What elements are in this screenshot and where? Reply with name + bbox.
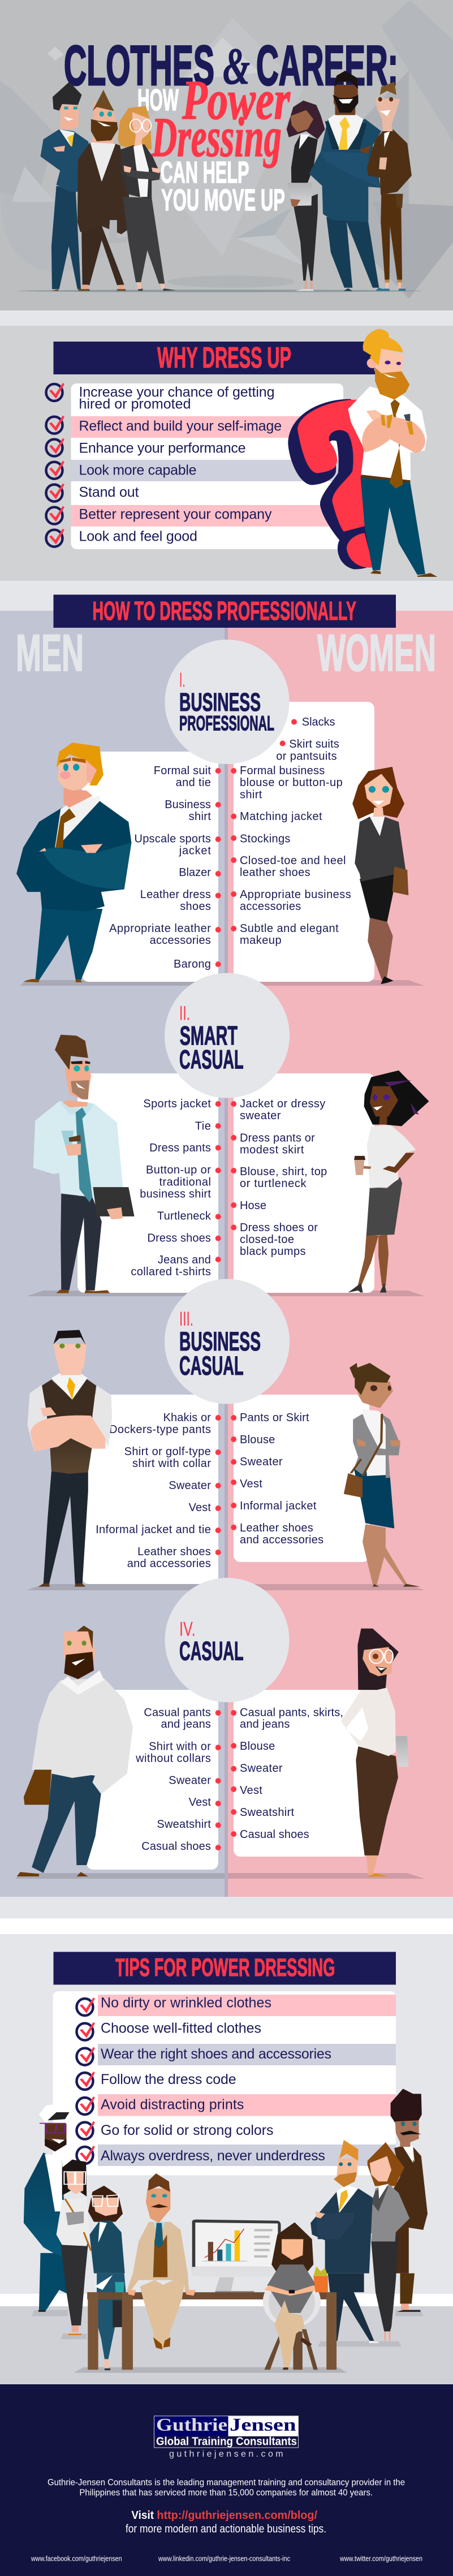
label: men: MEN — [16, 624, 84, 682]
panel: III business casual — [27, 1279, 425, 1590]
women list: Casual shoes — [240, 1828, 309, 1841]
characters — [16, 743, 408, 984]
women list — [231, 1412, 323, 1546]
women list: blouse or button-up — [240, 776, 343, 789]
panel: hero — [0, 0, 453, 310]
panel: IV casual — [15, 1578, 425, 1897]
men list: collared t-shirts — [131, 1266, 211, 1278]
men list: Shirt with or — [149, 1741, 211, 1753]
women list: Jacket or dressy — [240, 1098, 325, 1110]
women list: sweater — [240, 1110, 281, 1122]
character: black woman with coffee — [348, 1071, 429, 1293]
panel: II smart casual — [27, 973, 429, 1296]
title: & — [223, 37, 250, 95]
social links — [31, 2555, 422, 2562]
call to action: http://guthriejensen.com/blog/ — [157, 2509, 317, 2522]
women list: closed-toe — [240, 1233, 294, 1246]
social links: www.twitter.com/guthriejensen — [339, 2555, 422, 2562]
character: ginger bearded man — [348, 329, 437, 577]
character: woman in glasses with purse — [57, 2160, 91, 2335]
social links: www.facebook.com/guthriejensen — [31, 2555, 122, 2562]
character: bearded man in brown jacket — [77, 90, 130, 291]
character: woman in black skirt suit — [352, 767, 408, 984]
women list — [231, 1098, 327, 1258]
panel: why dress up — [0, 326, 453, 581]
women list: makeup — [240, 934, 282, 947]
floor shadows — [32, 2310, 423, 2346]
men list: and jeans — [161, 1718, 211, 1731]
heading circle: II. — [179, 1003, 190, 1025]
women list: Blouse — [240, 1740, 275, 1753]
men list: Dress pants — [149, 1142, 211, 1154]
men list — [109, 765, 221, 970]
women list: Stockings — [240, 832, 290, 845]
panel: tips for power dressing — [24, 1952, 428, 2373]
women list: Subtle and elegant — [240, 922, 339, 935]
men list: shirt — [189, 810, 211, 823]
women list: black pumps — [240, 1245, 305, 1258]
character: man with cap and teal blazer — [24, 2104, 70, 2312]
men list: Jeans and — [158, 1254, 211, 1266]
icon: bag and mug on table — [113, 2282, 133, 2327]
men list: Dockers-type pants — [109, 1423, 211, 1436]
women list — [231, 1707, 343, 1841]
men list: Barong — [174, 958, 211, 970]
character: black man in teal suit — [309, 71, 391, 291]
men list: Blazer — [179, 866, 211, 879]
women list: or pantsuits — [276, 750, 337, 762]
heading bar: how to dress professionally — [53, 595, 396, 628]
men list: Appropriate leather — [109, 922, 211, 935]
women list: Skirt suits — [289, 738, 339, 750]
men list: Leather shoes — [137, 1546, 211, 1558]
checklist panel: Enhance your performance — [79, 441, 245, 456]
heading circle: CASUAL — [179, 1045, 244, 1075]
heading circle: CASUAL — [179, 1350, 244, 1380]
wooden table — [87, 2292, 336, 2370]
women list: Blouse, shirt, top — [240, 1166, 327, 1178]
characters — [33, 1035, 429, 1293]
character: woman on chair with coffee — [263, 2223, 321, 2370]
heading circle: SMART — [180, 1020, 238, 1051]
women list: and jeans — [240, 1718, 290, 1731]
character: woman with glasses in cream blouse — [341, 1629, 408, 1876]
heading circle: IV. — [179, 1619, 196, 1641]
divider band above professional section — [0, 581, 453, 611]
men list: jacket — [179, 845, 211, 857]
tips checklist: Follow the dress code — [101, 2072, 236, 2087]
call to action: Visit — [131, 2509, 154, 2522]
heading circle: I. — [179, 668, 185, 691]
icon: monitor with bar chart — [192, 2220, 281, 2293]
men list: traditional — [159, 1176, 211, 1188]
men list: business shirt — [140, 1188, 211, 1200]
men list: and tie — [176, 776, 211, 789]
characters — [28, 1330, 420, 1587]
heading circle — [165, 640, 290, 764]
men list: Khakis or — [163, 1412, 211, 1424]
character: tall man in brown suit — [387, 2089, 428, 2312]
men list: Button-up or — [146, 1164, 211, 1176]
women list: Blouse — [240, 1434, 275, 1446]
subtitle: YOU MOVE UP — [161, 183, 285, 217]
heading circle — [165, 1578, 290, 1702]
character: man in teal three-piece suit — [16, 743, 131, 982]
panel: I business professional — [16, 640, 425, 986]
heading circle — [165, 973, 290, 1098]
company description: Guthrie-Jensen Consultants is the leading management training and consultancy provider in the — [48, 2478, 405, 2488]
call to action — [126, 2509, 326, 2535]
men list: Sweater — [169, 1479, 211, 1492]
checklist panel — [71, 383, 343, 549]
character: bearded man in white sweater — [17, 1625, 133, 1876]
women list: Appropriate business — [240, 888, 351, 901]
page divider band — [0, 310, 453, 326]
checklist panel: hired or promoted — [79, 396, 191, 412]
heading circle — [165, 1279, 290, 1404]
men list: without collars — [135, 1752, 211, 1764]
men list: Sweater — [169, 1774, 211, 1787]
women list: Dress shoes or — [240, 1222, 318, 1234]
website: guthriejensen.com — [169, 2449, 283, 2459]
women list: Sweatshirt — [240, 1806, 294, 1819]
heading bar: why dress up — [53, 342, 376, 374]
hero characters — [41, 71, 412, 291]
men list: Business — [165, 799, 211, 811]
subtitle: Power — [182, 68, 291, 131]
women list: Pants or Skirt — [240, 1412, 309, 1424]
women list: or turtleneck — [240, 1177, 307, 1190]
checklist panel: Increase your chance of getting — [79, 385, 275, 400]
character: man in brown vest — [28, 1330, 112, 1587]
heading bar: tips — [53, 1952, 396, 1984]
heading bar: why dress up: WHY DRESS UP — [157, 342, 291, 374]
character: blonde woman with glasses — [118, 106, 176, 291]
women list — [231, 716, 351, 947]
women list: Slacks — [302, 716, 335, 728]
character: woman in grey cardigan with bag — [344, 1363, 420, 1587]
men list: Upscale sports — [135, 832, 211, 845]
men list — [96, 1412, 221, 1570]
women list: Matching jacket — [240, 810, 322, 823]
character: woman in dark teal suit — [88, 2186, 127, 2370]
women list: Vest — [240, 1784, 262, 1797]
subtitle — [137, 68, 291, 217]
checklist panel: Look more capable — [79, 462, 197, 478]
call to action: for more modern and actionable business tips. — [126, 2523, 326, 2535]
heading circle: PROFESSIONAL — [179, 712, 274, 735]
women list: leather shoes — [240, 866, 310, 879]
heading circle: III. — [179, 1308, 193, 1330]
subtitle: HOW — [137, 83, 179, 117]
men list: Leather dress — [140, 888, 211, 901]
men list: Formal suit — [154, 765, 211, 777]
checklist panel: Reflect and build your self-image — [79, 418, 282, 434]
women list: Casual pants, skirts, — [240, 1707, 343, 1719]
tips checklist: Always overdress, never underdress — [101, 2148, 325, 2164]
icon: question mark — [288, 399, 376, 569]
men list: Casual pants — [144, 1707, 211, 1719]
women list: Dress pants or — [240, 1132, 315, 1145]
character: man in light blue shirt with cup and folder — [33, 1035, 135, 1293]
question mark and man illustration — [288, 329, 437, 577]
men list: shoes — [180, 900, 211, 913]
company description: Philippines that has serviced more than 15,000 companies for almost 40 years. — [79, 2488, 373, 2498]
characters — [17, 1625, 408, 1876]
tips checklist: Choose well-fitted clothes — [101, 2021, 261, 2036]
logo: GuthrieJensen: Jensen — [230, 2414, 296, 2435]
women list: Vest — [240, 1478, 262, 1490]
character: woman in black suit with tablet — [287, 101, 325, 291]
heading circle: BUSINESS — [179, 688, 261, 717]
tips checklist: Go for solid or strong colors — [101, 2122, 274, 2138]
men list: accessories — [150, 934, 211, 947]
men list: Informal jacket and tie — [96, 1524, 211, 1536]
women list: accessories — [240, 900, 301, 913]
men list: Shirt or golf-type — [124, 1446, 211, 1458]
men list: Sports jacket — [143, 1098, 211, 1110]
hero faceted background — [0, 0, 453, 299]
logo: GuthrieJensen — [154, 2414, 299, 2448]
men list: and accessories — [127, 1557, 211, 1570]
logo: GuthrieJensen: Guthrie — [156, 2414, 227, 2435]
panel: men and women background columns — [0, 611, 453, 1897]
men list: Vest — [189, 1796, 211, 1809]
character: woman in grey jacket — [362, 2142, 409, 2341]
men list: Vest — [189, 1501, 211, 1514]
men list: Dress shoes — [147, 1232, 211, 1244]
divider bands above tips — [0, 1897, 453, 2384]
tips checklist: No dirty or wrinkled clothes — [101, 1995, 271, 2011]
women list: Closed-toe and heel — [240, 855, 346, 867]
women list: Sweater — [240, 1456, 283, 1468]
men list: shirt with collar — [132, 1457, 211, 1470]
women list: Hose — [240, 1199, 266, 1212]
women list: Leather shoes — [240, 1522, 313, 1534]
character: man in brown suit with cup — [367, 82, 412, 291]
men list: Turtleneck — [157, 1210, 212, 1222]
women list: Informal jacket — [240, 1500, 317, 1512]
men list — [131, 1098, 221, 1278]
men list: Casual shoes — [141, 1840, 211, 1853]
tips checklist — [53, 1991, 396, 2175]
heading circle: BUSINESS — [179, 1326, 261, 1356]
men list: Tie — [195, 1120, 211, 1132]
checklist panel: Better represent your company — [79, 506, 272, 522]
tips checklist: Avoid distracting prints — [101, 2097, 244, 2113]
heading circle: CASUAL — [179, 1636, 244, 1666]
women list: Sweater — [240, 1762, 283, 1775]
women list: Formal business — [240, 765, 325, 777]
checklist panel: Look and feel good — [79, 529, 197, 545]
character: bearded man in navy suit — [310, 2140, 378, 2343]
women list: modest skirt — [240, 1144, 304, 1157]
icon: potted plant — [313, 2267, 328, 2292]
character: man in beige blazer sitting on table — [127, 2173, 196, 2349]
check icons — [46, 383, 64, 547]
tips checklist: Wear the right shoes and accessories — [101, 2046, 331, 2062]
social links: www.linkedin.com/guthrie-jensen-consultants-inc — [158, 2555, 290, 2562]
subtitle: Dressing — [151, 106, 282, 169]
company description — [48, 2478, 405, 2498]
logo: GuthrieJensen: Global Training Consultants — [156, 2436, 297, 2448]
women list: and accessories — [240, 1534, 323, 1546]
character: man in navy suit — [41, 82, 93, 291]
men list: Sweatshirt — [157, 1818, 211, 1831]
panel: footer — [0, 2384, 453, 2576]
women list: shirt — [240, 788, 262, 801]
checklist panel: Stand out — [79, 484, 139, 500]
office team scene — [24, 2089, 428, 2373]
subtitle: CAN HELP — [161, 156, 249, 189]
title: CLOTHES — [64, 34, 214, 97]
men list — [135, 1707, 221, 1853]
